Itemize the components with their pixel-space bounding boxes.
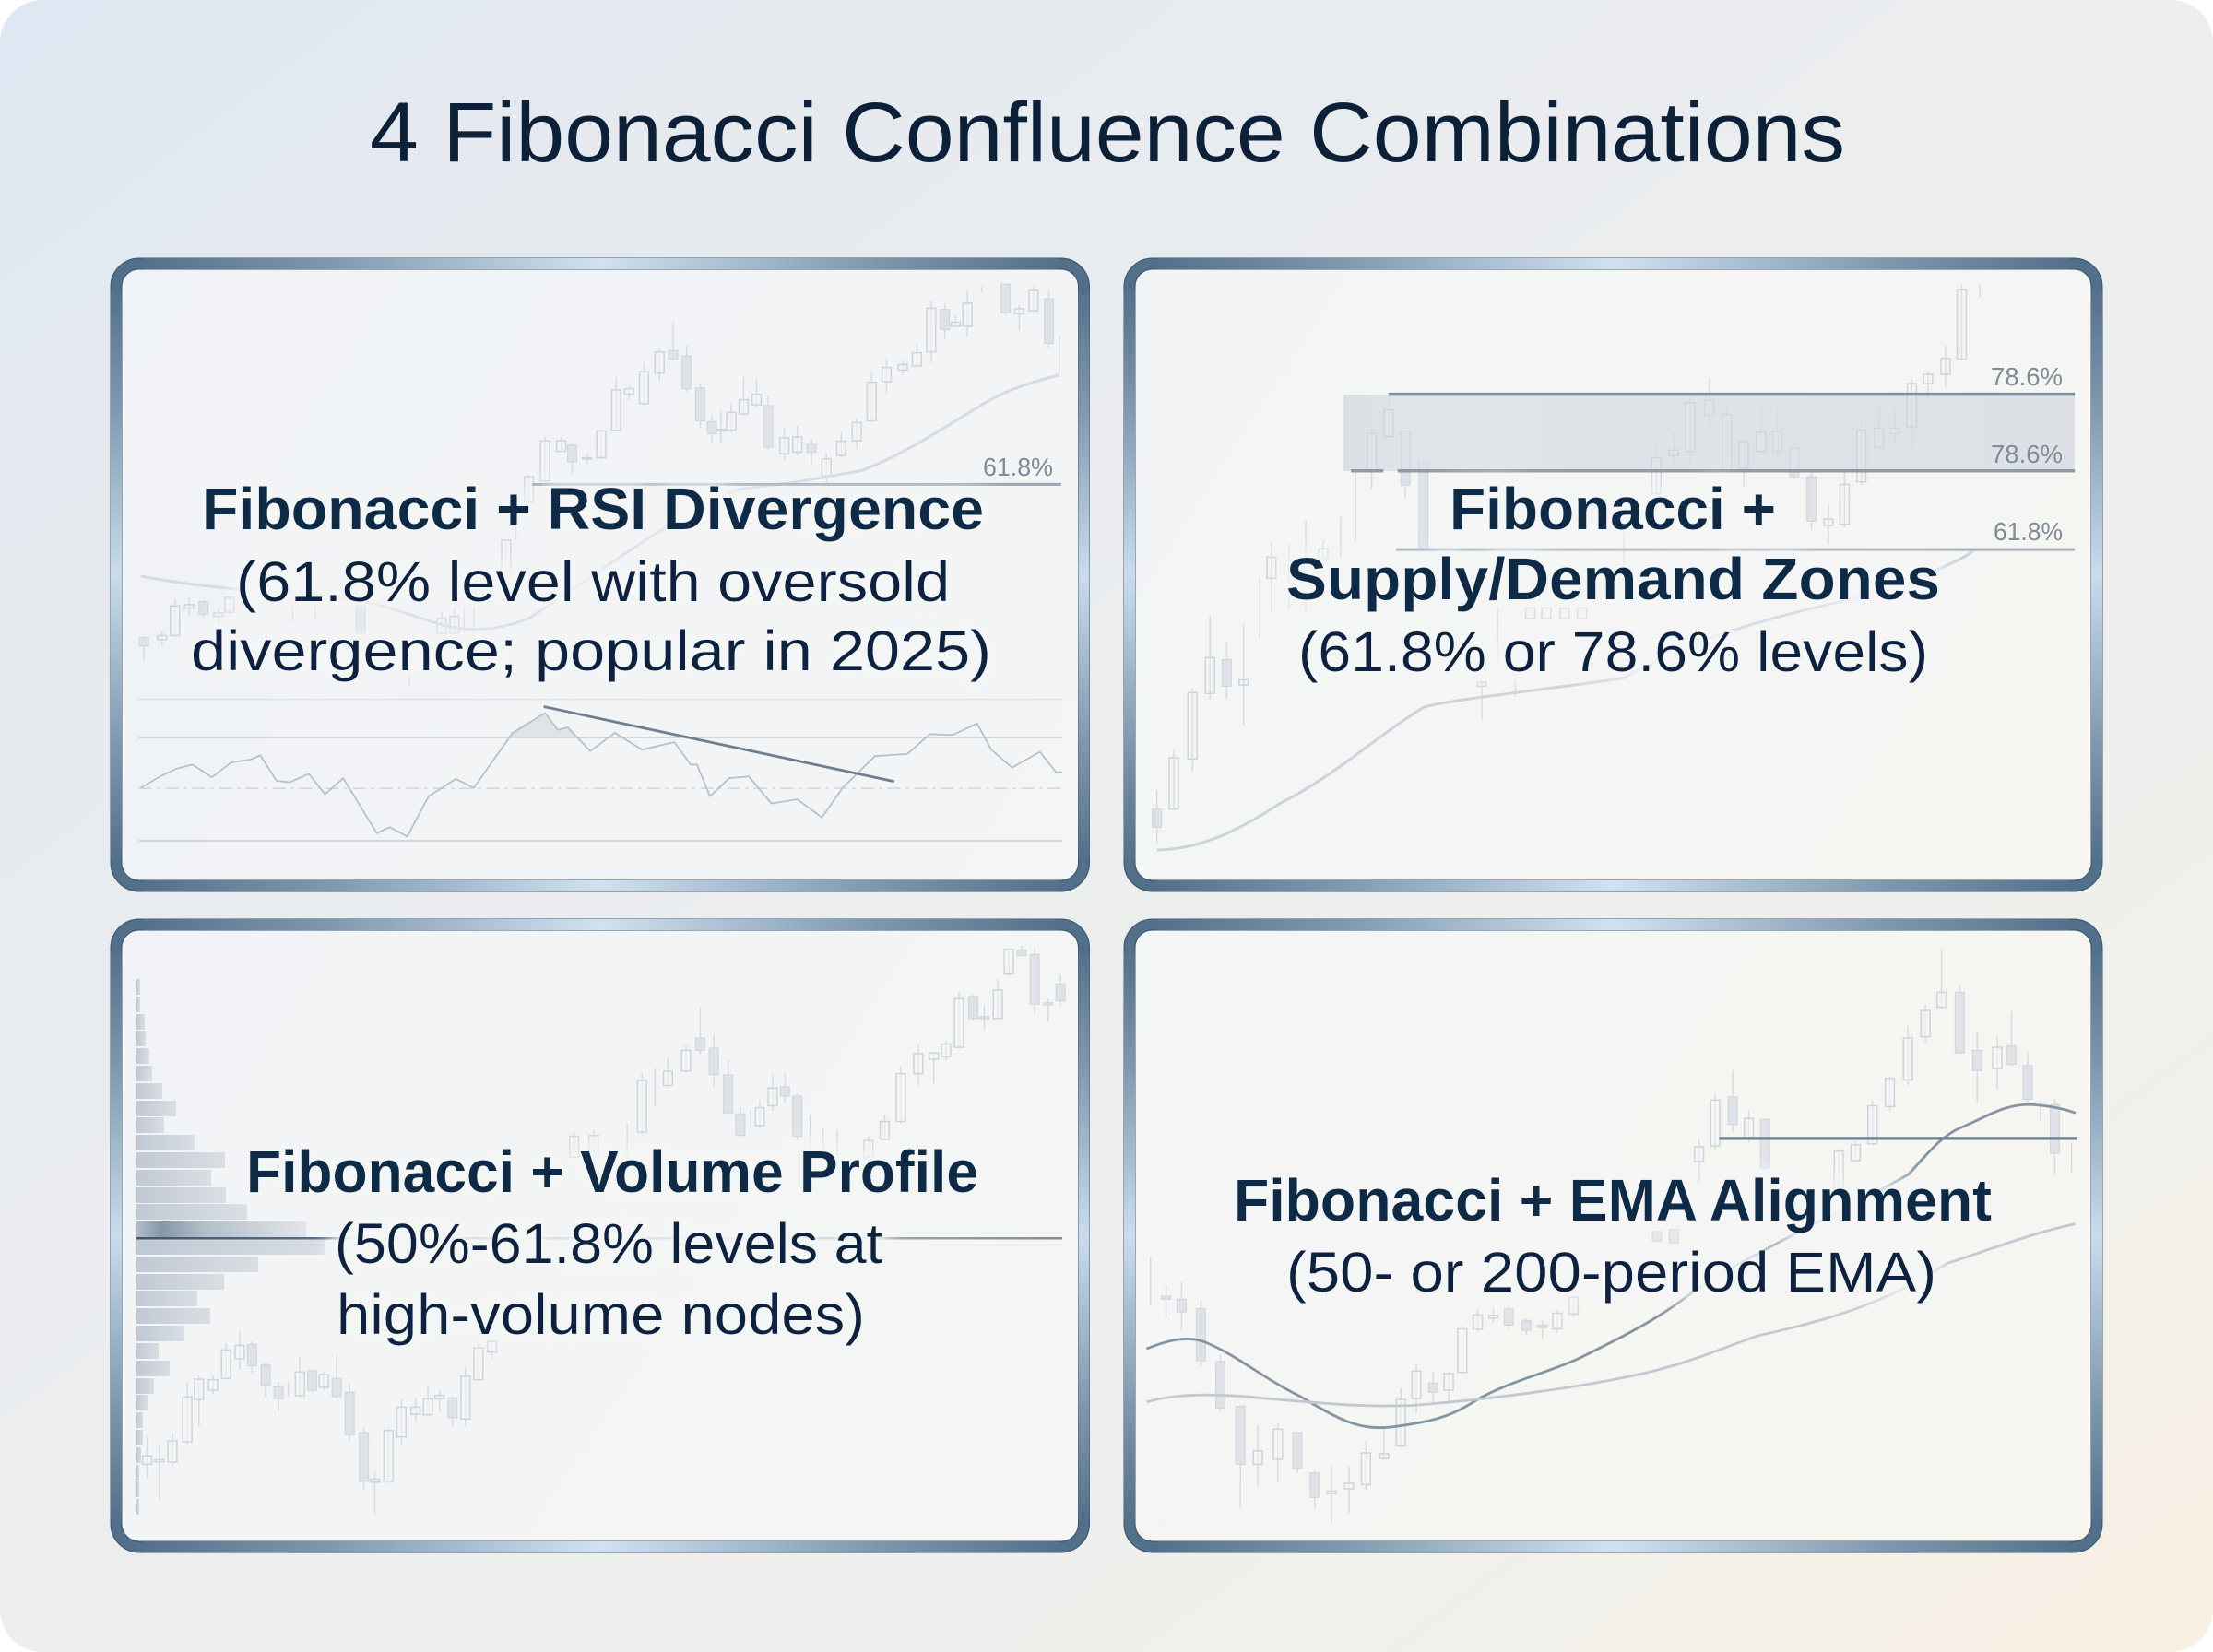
price chart: candlesticks [143,946,1065,1516]
point of control level line [136,1237,1062,1239]
panel frame: top right [1124,258,2102,891]
panel frame: bottom right [1124,919,2102,1552]
text block: RSI divergence [191,476,991,682]
Fibonacci level labels: 61.8% [1994,517,2063,546]
panel: Fibonacci + Volume Profile [116,925,1084,1547]
Fibonacci level labels [1991,362,2063,546]
text block: EMA alignment [1234,1167,1992,1304]
panel: Fibonacci + Supply/Demand Zones [1130,264,2097,886]
text block: EMA alignment: (50- or 200-period EMA) [1286,1241,1936,1304]
text block: RSI divergence: Fibonacci + RSI Divergence [202,476,984,542]
text block: supply and demand [1286,476,1940,683]
text block: volume profile: (50%-61.8% levels at [335,1212,882,1275]
supply/demand zone band [1343,395,2075,471]
Fibonacci level labels: 78.6% [1991,362,2063,391]
panel: Fibonacci + RSI Divergence [116,264,1084,886]
panel: Fibonacci + EMA Alignment [1130,925,2097,1547]
text block: EMA alignment: Fibonacci + EMA Alignment [1234,1167,1992,1233]
price chart: candlesticks and moving average [1153,284,2075,850]
text block: RSI divergence: (61.8% level with oversold [236,550,950,613]
panel frame: top left [111,258,1090,891]
price chart: candlesticks and moving average [139,284,1061,686]
text block: volume profile: Fibonacci + Volume Profile [246,1139,978,1205]
text block: supply and demand: Supply/Demand Zones [1286,546,1940,612]
price chart: candlesticks and two EMAs [1146,950,2077,1522]
RSI sub-chart with divergence line [139,700,1062,841]
text block: supply and demand: Fibonacci + [1450,476,1776,542]
Fibonacci level labels: 78.6% [1991,440,2063,468]
volume profile histogram [136,979,325,1515]
text block: supply and demand: (61.8% or 78.6% levels) [1298,620,1928,683]
text block: volume profile [246,1139,978,1346]
text block: RSI divergence: divergence; popular in 2025) [191,620,991,682]
panel frame: bottom left [111,919,1090,1552]
title: 4 Fibonacci Confluence Combinations [370,86,1845,180]
Fibonacci level label: 61.8%: 61.8% [983,453,1053,481]
text block: volume profile: high-volume nodes) [337,1283,865,1346]
